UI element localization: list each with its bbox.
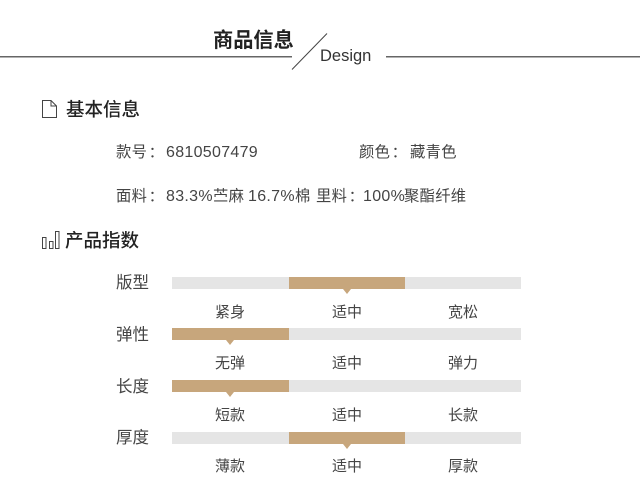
row label: 长度: [116, 378, 149, 396]
fabric and lining: 里料: [316, 188, 347, 205]
option: thin: 薄款: [215, 458, 245, 475]
colour: [359, 142, 457, 163]
option: regular: 适中: [332, 304, 362, 321]
fabric and lining: 16.7%: [248, 188, 295, 205]
icon: bar chart: [42, 231, 60, 249]
icon: document: [42, 100, 57, 118]
subtitle: Design: Design: [320, 47, 371, 65]
option: slim: 紧身: [215, 304, 245, 321]
fabric and lining: 83.3%: [166, 188, 213, 205]
option: regular: 适中: [332, 407, 362, 424]
option: stretchy: 弹力: [448, 355, 478, 372]
fabric and lining: ：: [145, 186, 160, 207]
row label: 厚度: [116, 429, 149, 447]
fabric and lining: 100%: [363, 188, 405, 205]
option: regular: 适中: [332, 355, 362, 372]
scale bar: [172, 432, 521, 444]
item number: [116, 142, 258, 163]
heading: product indices: 产品指数: [65, 230, 139, 251]
option: loose: 宽松: [448, 304, 478, 321]
title: 商品信息: [213, 30, 294, 52]
option: regular: 适中: [332, 458, 362, 475]
fabric and lining: ：: [345, 186, 360, 207]
item number: ：: [145, 142, 160, 163]
scale bar: [172, 380, 521, 392]
row label: 弹性: [116, 326, 149, 344]
fabric and lining: 苎麻: [213, 188, 244, 205]
item number: 款号: [116, 144, 147, 161]
header rule and slash: [0, 33, 640, 70]
row: fit: [116, 274, 521, 321]
row: thickness: [116, 428, 521, 475]
option: long: 长款: [448, 407, 478, 424]
colour: 颜色: [359, 144, 390, 161]
item number: 6810507479: [166, 144, 258, 161]
scale bar: [172, 277, 521, 289]
colour: ：: [388, 142, 403, 163]
fabric and lining: 聚酯纤维: [404, 188, 466, 205]
row: length: [116, 378, 521, 424]
fabric and lining: [116, 186, 466, 207]
row: elasticity: [116, 326, 521, 372]
row label: 版型: [116, 274, 149, 292]
fabric and lining: 棉: [295, 188, 311, 205]
option: short: 短款: [215, 407, 245, 424]
scale bar: [172, 328, 521, 340]
option: thick: 厚款: [448, 458, 478, 475]
fabric and lining: 面料: [116, 188, 147, 205]
colour: 藏青色: [410, 144, 457, 161]
heading: basic information: 基本信息: [66, 99, 140, 120]
option: no stretch: 无弹: [215, 355, 245, 372]
